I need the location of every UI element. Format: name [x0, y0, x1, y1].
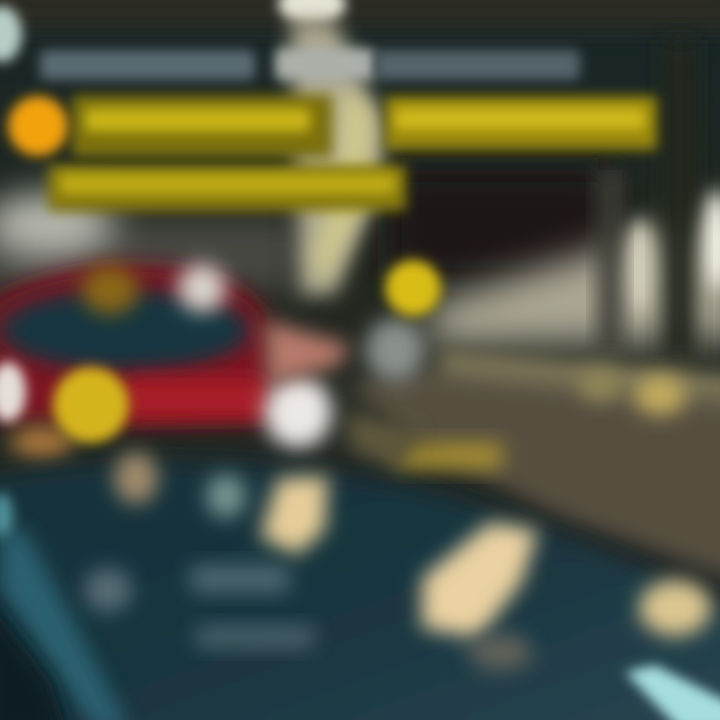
light beam	[290, 20, 385, 295]
icon: yellow circle on car	[53, 367, 129, 443]
red car	[0, 264, 350, 458]
tunnel lights and pillars	[0, 0, 720, 360]
highlighted heading band	[48, 95, 657, 211]
road	[345, 318, 720, 580]
car hood foreground	[0, 462, 720, 720]
icon: orange circle	[8, 96, 68, 156]
title line	[40, 48, 580, 80]
hood icons and labels	[0, 452, 720, 720]
icon: yellow circle on road	[385, 260, 441, 316]
